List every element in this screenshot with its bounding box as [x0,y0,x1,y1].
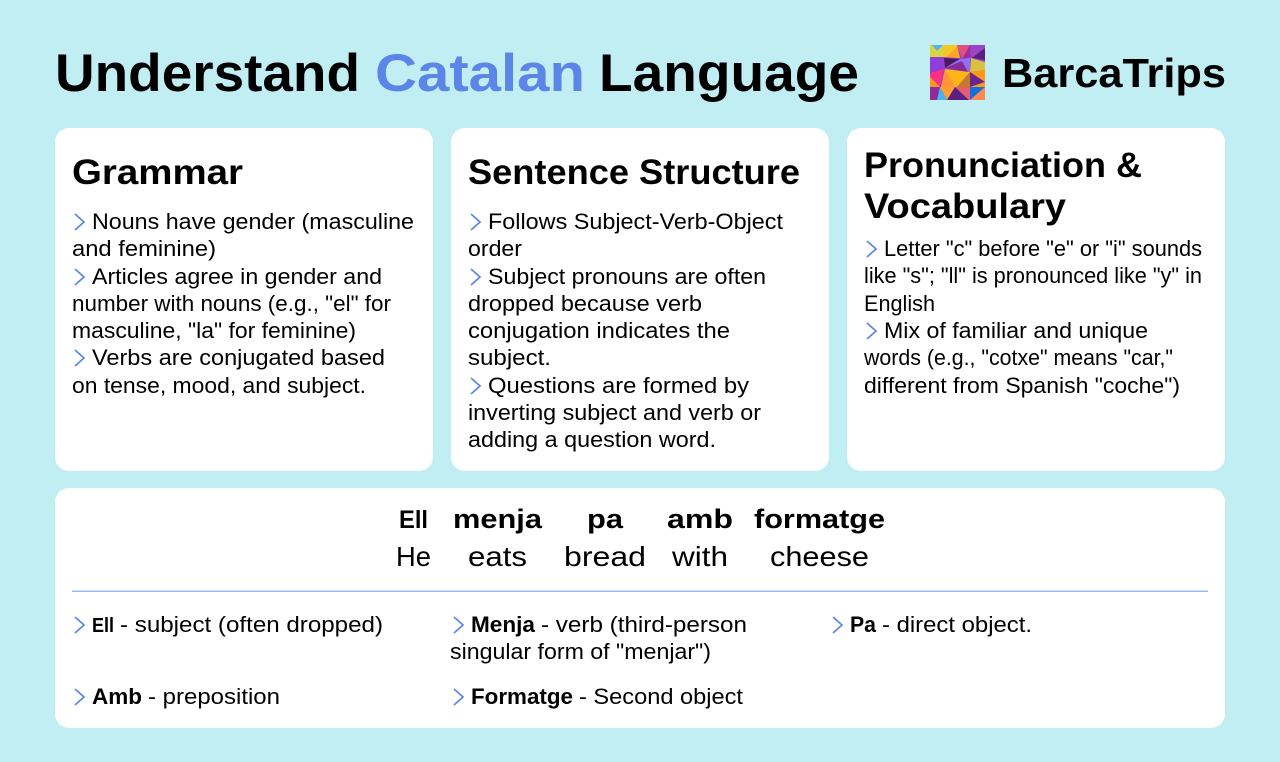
english translation: He [396,541,431,572]
sentence structure body text: inverting subject and verb or [468,400,762,425]
pronunciation body text: Letter "c" before "e" or "i" sounds [884,236,1202,261]
grammar body text: Articles agree in gender and [92,264,382,289]
catalan sentence: pa [587,504,624,534]
sentence structure body text: subject. [468,345,551,370]
pronunciation body text [863,236,1202,398]
heading: grammar: Grammar [72,153,243,192]
catalan sentence [399,504,885,534]
pronunciation body text: like "s"; "ll" is pronounced like "y" in [864,263,1202,288]
grammar body text: on tense, mood, and subject. [72,373,366,398]
catalan sentence: menja [453,504,543,534]
grammar body text: masculine, "la" for feminine) [72,318,356,343]
english translation [396,541,869,572]
catalan sentence: Ell [399,506,428,534]
grammar body text: Verbs are conjugated based [92,345,385,370]
note: Ell: Ell [92,615,114,637]
english translation: cheese [770,541,869,572]
panel: sentence structure [451,128,829,471]
sentence structure body text: Follows Subject-Verb-Object [488,209,784,234]
sentence structure body text [468,209,784,452]
title: Language [599,44,859,103]
grammar body text: number with nouns (e.g., "el" for [72,291,391,316]
english translation: eats [468,541,527,572]
grammar body text: and feminine) [72,236,216,261]
grammar body text [72,209,414,398]
sentence structure body text: dropped because verb [468,291,702,316]
panel: pronunciation and vocabulary [847,128,1225,471]
panel: grammar [55,128,433,471]
sentence structure body text: Questions are formed by [488,373,750,398]
icon: BarcaTrips mosaic logo [930,45,985,100]
title: Understand [55,44,360,103]
sentence structure body text: order [468,236,523,261]
heading: pronunciation and vocabulary [864,146,1142,226]
note: Pa: Pa [850,612,877,637]
heading: sentence structure: Sentence Structure [468,153,800,192]
note: Amb: Amb [92,684,142,709]
heading: pronunciation and vocabulary: Vocabulary [864,187,1067,226]
note: Pa: - direct object. [882,612,1032,637]
note: Menja: Menja [471,612,536,637]
note: Menja: - verb (third-person [541,612,747,637]
note: Amb: - preposition [148,684,280,709]
english translation: with [671,541,728,572]
title: Catalan [375,44,585,103]
catalan sentence: formatge [754,504,885,534]
note: Amb [75,684,280,709]
catalan sentence: amb [667,504,733,534]
note: Formatge: Formatge [471,684,573,709]
pronunciation body text: different from Spanish "coche") [864,373,1180,398]
sentence structure body text: Subject pronouns are often [488,264,766,289]
grammar body text: Nouns have gender (masculine [92,209,414,234]
note: Formatge [454,684,744,709]
sentence structure body text: adding a question word. [468,427,716,452]
note: Menja: singular form of "menjar") [450,639,711,664]
pronunciation body text: English [864,291,935,316]
note: Menja [450,612,747,664]
title [55,44,859,103]
logo wordmark: BarcaTrips [1002,50,1226,96]
pronunciation body text: Mix of familiar and unique [884,318,1148,343]
sentence structure body text: conjugation indicates the [468,318,730,343]
pronunciation body text: words (e.g., "cotxe" means "car," [863,345,1173,370]
heading: pronunciation and vocabulary: Pronunciation & [864,146,1142,185]
note: Ell: - subject (often dropped) [120,612,383,637]
english translation: bread [564,541,646,572]
note: Formatge: - Second object [579,684,744,709]
panel: example sentence [55,488,1225,728]
